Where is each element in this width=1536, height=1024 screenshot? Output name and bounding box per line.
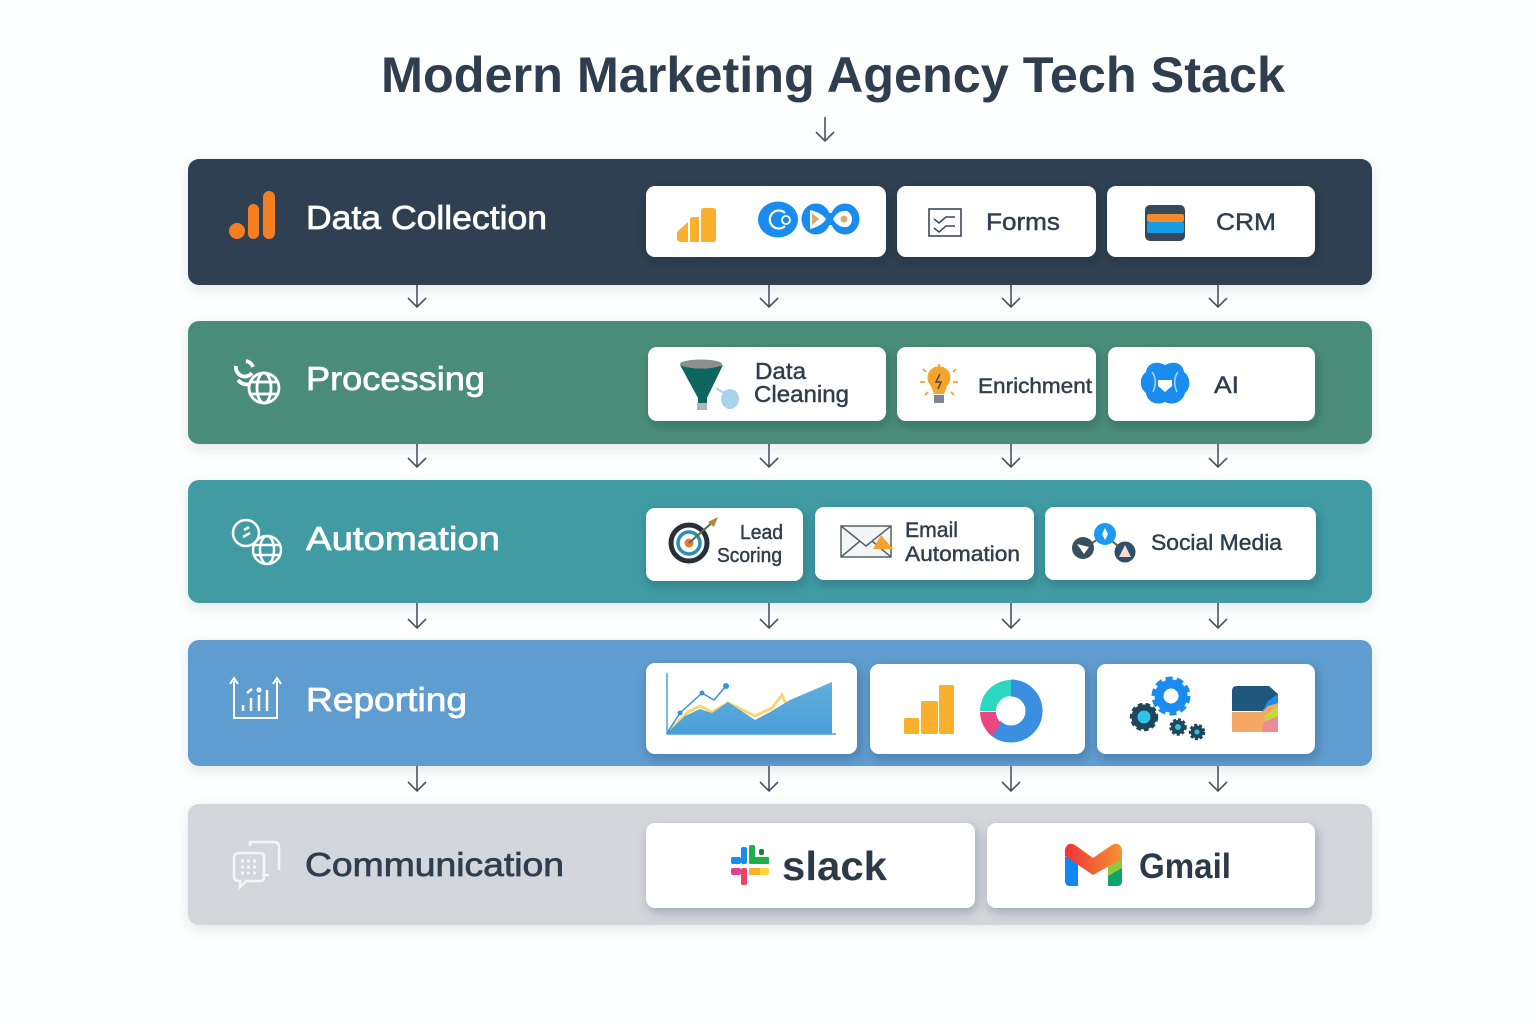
card: slack: [646, 823, 975, 908]
panel: data collection: [188, 159, 1372, 285]
panel: automation: [188, 480, 1372, 603]
icon: orange analytics bars: [229, 191, 275, 239]
arrows: automation to reporting: [408, 603, 1227, 628]
heading: data collection: Data Collection: [306, 199, 547, 236]
heading: reporting: Reporting: [306, 681, 467, 718]
card: forms: Forms: [986, 209, 1060, 236]
card: gmail: Gmail: [1139, 847, 1231, 886]
arrow: title to stack: [816, 117, 834, 141]
heading: communication: Communication: [305, 846, 564, 883]
card: data cleaning: Data: [755, 358, 806, 384]
card: bars and donut: [870, 664, 1085, 754]
card: analytics and loop logo: [646, 186, 886, 257]
card: forms: [897, 186, 1096, 257]
card: email automation: Email: [905, 519, 958, 542]
card: enrichment: [897, 347, 1096, 421]
title: Modern Marketing Agency Tech Stack: [381, 47, 1285, 103]
icon: chat bubbles: [234, 842, 279, 887]
card: area chart: [646, 663, 857, 754]
card: ai: AI: [1214, 372, 1239, 399]
card: enrichment: Enrichment: [978, 375, 1092, 398]
icon: processing globe: [236, 361, 279, 403]
card: social media: Social Media: [1151, 530, 1283, 555]
card: social media: [1045, 507, 1316, 580]
arrows: reporting to communication: [408, 766, 1227, 791]
card: email automation: Automation: [905, 543, 1020, 566]
card: lead scoring: [646, 508, 803, 581]
card: slack: slack: [782, 843, 887, 889]
card: crm: [1107, 186, 1315, 257]
heading: processing: Processing: [306, 360, 485, 397]
card: crm: CRM: [1216, 209, 1276, 236]
icon: automation globe: [233, 520, 281, 564]
card: data cleaning: Cleaning: [754, 381, 849, 407]
card: email automation: [815, 507, 1034, 580]
card: gears and folder: [1097, 664, 1315, 754]
card: lead scoring: Scoring: [717, 545, 782, 567]
card: ai: [1108, 347, 1315, 421]
card: gmail: [987, 823, 1315, 908]
arrows: processing to automation: [408, 444, 1227, 467]
panel: communication: [188, 804, 1372, 925]
card: lead scoring: Lead: [740, 522, 783, 544]
card: data cleaning: [648, 347, 886, 421]
arrows: data collection to processing: [408, 285, 1227, 307]
icon: reporting chart: [230, 678, 281, 718]
panel: reporting: [188, 640, 1372, 766]
heading: automation: Automation: [306, 520, 500, 557]
panel: processing: [188, 321, 1372, 444]
